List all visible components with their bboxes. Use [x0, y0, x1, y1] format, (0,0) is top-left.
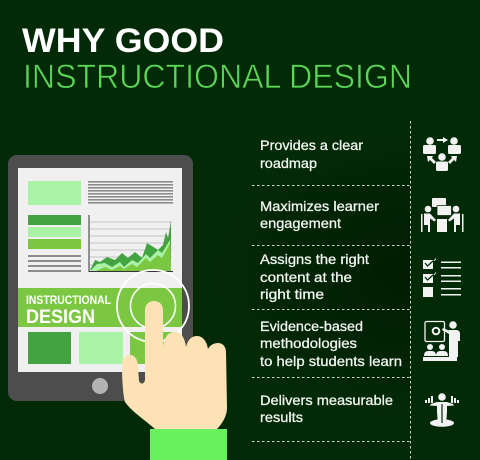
item 3 text: content at the — [260, 269, 352, 285]
item 4 text: methodologies — [260, 335, 357, 351]
icon: checklist — [423, 258, 461, 297]
item 5 text: results — [260, 409, 303, 425]
area chart — [89, 215, 173, 272]
tablet body — [8, 155, 193, 401]
item 1 text: roadmap — [260, 155, 317, 171]
dashed dividers — [252, 121, 411, 460]
bottom tiles — [28, 332, 174, 364]
icon: teacher with students — [423, 321, 460, 361]
item 5 text — [260, 392, 393, 425]
item 1 text: Provides a clear — [260, 137, 363, 153]
banner label — [26, 295, 111, 328]
item 2 text: engagement — [260, 215, 341, 231]
title — [22, 22, 412, 96]
hand — [122, 301, 227, 429]
item 5 text: Delivers measurable — [260, 392, 393, 408]
touch rings — [117, 270, 189, 342]
title: INSTRUCTIONAL DESIGN — [23, 58, 412, 96]
item 3 text — [260, 251, 369, 302]
icon: person with charts — [425, 393, 459, 427]
item 3 text: right time — [260, 286, 324, 302]
banner label: INSTRUCTIONAL — [26, 295, 111, 307]
item 4 text — [260, 318, 402, 369]
banner — [18, 288, 182, 327]
short text lines — [28, 255, 81, 272]
item 4 text: Evidence-based — [260, 318, 363, 334]
tablet — [8, 155, 193, 401]
image placeholder — [28, 181, 81, 205]
icon: discussion at table — [421, 198, 464, 232]
sleeve — [150, 429, 227, 460]
text lines block — [88, 181, 173, 204]
item 3 text: Assigns the right — [260, 251, 369, 267]
icon: roadmap people cycle — [423, 137, 461, 171]
home button — [92, 378, 108, 394]
item 2 text — [260, 198, 379, 231]
item 4 text: to help students learn — [260, 353, 402, 369]
banner label: DESIGN — [26, 307, 95, 328]
tablet screen — [18, 168, 182, 372]
title: WHY GOOD — [22, 22, 224, 60]
item 1 text — [260, 137, 363, 171]
colored bars — [28, 215, 81, 249]
item 2 text: Maximizes learner — [260, 198, 379, 214]
